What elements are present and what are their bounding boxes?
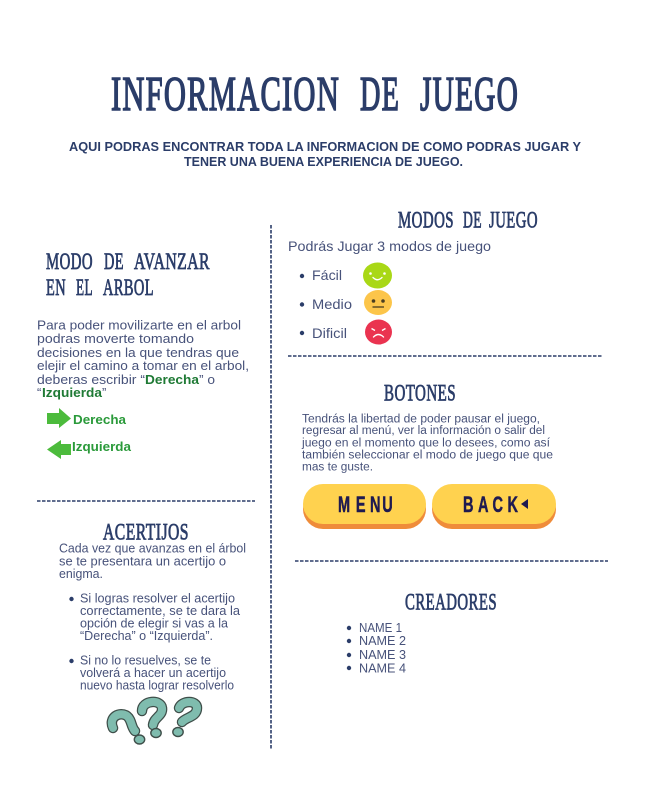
list: acertijos: volverá a hacer un acertijo: [80, 666, 226, 680]
button: menu: MENU: [338, 492, 393, 517]
heading: modo de avanzar: DE: [104, 249, 124, 274]
heading: modos de juego: JUEGO: [489, 208, 538, 232]
text: acertijos intro: [59, 542, 246, 581]
heading: creadores: CREADORES: [405, 590, 497, 614]
subtitle: AQUI PODRAS ENCONTRAR TODA LA INFORMACION DE COMO PODRAS JUGAR Y: [69, 139, 581, 154]
text: acertijos intro: Cada vez que avanzas en el árbol: [59, 542, 246, 556]
text: modos intro: Podrás Jugar 3 modos de juego: [288, 238, 491, 254]
heading: modos de juego: MODOS: [398, 208, 454, 232]
text: botones description: regresar al menú, ver la información o salir del: [302, 425, 545, 437]
list: acertijos: opción de elegir si vas a la: [80, 616, 228, 630]
list: creadores: NAME 2: [359, 633, 406, 648]
legend: izquierda arrow: Izquierda: [72, 439, 132, 454]
title: DE: [360, 66, 400, 121]
list: creadores: NAME 4: [359, 660, 406, 676]
list: modos: Dificil: [312, 325, 347, 341]
text: avanzar description: Derecha: [145, 372, 200, 387]
list: acertijos: correctamente, se te dara la: [80, 604, 240, 618]
list: creadores: [347, 620, 406, 676]
text: avanzar description: “: [37, 385, 41, 400]
list: acertijos: “Derecha” o “Izquierda”.: [80, 629, 213, 643]
heading: modos de juego: DE: [463, 208, 482, 232]
legend: derecha arrow: Derecha: [73, 412, 127, 427]
subtitle: TENER UNA BUENA EXPERIENCIA DE JUEGO.: [184, 154, 463, 169]
heading: modos de juego: [398, 208, 538, 232]
list: creadores: NAME 3: [359, 647, 406, 662]
icon: happy face: [363, 262, 392, 288]
button: back: [432, 484, 556, 529]
list: modos: Medio: [312, 296, 352, 312]
legend: izquierda arrow: [47, 439, 132, 459]
heading: botones: BOTONES: [384, 380, 456, 406]
heading: modo de avanzar: MODO: [46, 249, 93, 274]
title: JUEGO: [420, 66, 519, 121]
list: modos: [300, 267, 352, 341]
heading: acertijos: ACERTIJOS: [103, 520, 189, 544]
icon: question marks: [112, 702, 197, 744]
list: acertijos: [69, 592, 240, 692]
text: avanzar description: Para poder movilizarte en el arbol: [37, 318, 241, 332]
heading: modo de avanzar: [46, 249, 210, 300]
text: acertijos intro: se te presentara un acertijo o: [59, 554, 226, 568]
list: modos: Fácil: [312, 267, 342, 283]
text: acertijos intro: enigma.: [59, 567, 103, 581]
heading: modo de avanzar: EN: [46, 275, 66, 300]
text: botones description: [301, 414, 553, 474]
icon: sad face: [365, 320, 392, 344]
text: avanzar description: deberas escribir “: [37, 372, 145, 387]
list: acertijos: Si no lo resuelves, se te: [80, 654, 211, 668]
button: back: BACK: [463, 492, 518, 517]
text: avanzar description: ” o: [199, 372, 215, 387]
text: avanzar description: decisiones en la que tendras que: [37, 345, 239, 360]
text: botones description: Tendrás la libertad de poder pausar el juego,: [302, 414, 540, 426]
heading: modo de avanzar: ARBOL: [103, 275, 154, 300]
text: avanzar description: [37, 318, 249, 400]
text: avanzar description: ”: [102, 385, 106, 400]
list: acertijos: nuevo hasta lograr resolverlo: [80, 678, 234, 692]
icon: neutral face: [364, 290, 392, 315]
heading: modo de avanzar: AVANZAR: [134, 249, 210, 274]
list: acertijos: Si logras resolver el acertijo: [80, 592, 235, 606]
button: menu: [303, 484, 426, 529]
text: botones description: también seleccionar el modo de juego que que: [302, 450, 553, 462]
list: creadores: NAME 1: [359, 620, 402, 635]
text: botones description: juego en el momento que lo desees, como así: [301, 438, 551, 450]
legend: derecha arrow: [47, 408, 127, 428]
heading: modo de avanzar: EL: [76, 275, 93, 300]
subtitle: [69, 139, 581, 169]
title: INFORMACION: [111, 66, 340, 121]
text: avanzar description: elejir el camino a tomar en el arbol,: [37, 358, 249, 373]
text: avanzar description: podras moverte tomando: [37, 331, 194, 346]
text: avanzar description: Izquierda: [42, 385, 103, 400]
text: botones description: mas te guste.: [302, 462, 373, 474]
